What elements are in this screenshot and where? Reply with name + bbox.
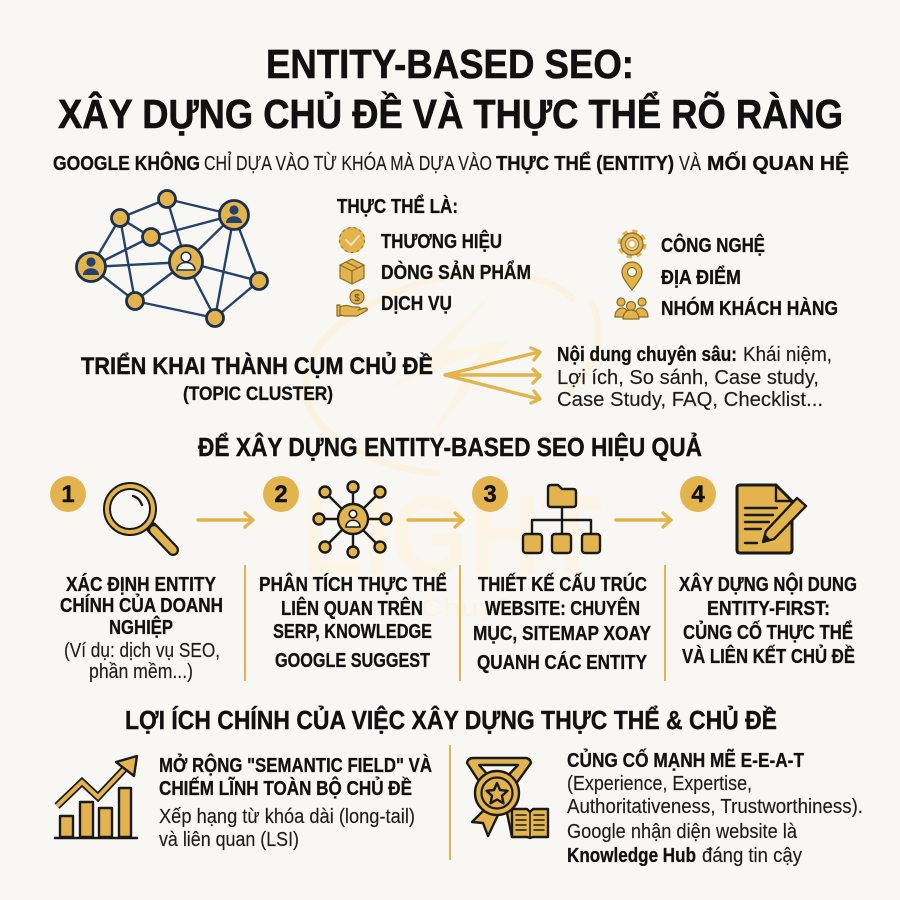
- step 1: [50, 476, 223, 683]
- subtitle: THỰC THỂ (ENTITY): [496, 152, 674, 175]
- watermark logo: Chuyên: [420, 595, 530, 622]
- benefit 1 text: CHIẾM LĨNH TOÀN BỘ CHỦ ĐỀ: [159, 776, 412, 800]
- section heading: benefits: LỢI ÍCH CHÍNH CỦA VIỆC XÂY DỰNG THỰC THỂ & CHỦ ĐỀ: [125, 704, 777, 735]
- step 1 text: phần mềm...): [89, 661, 193, 683]
- topic cluster heading: (TOPIC CLUSTER): [183, 384, 333, 405]
- step 1 text: [60, 573, 223, 683]
- icon: hand with coin: $: [354, 293, 360, 304]
- step 3 number: 3: [483, 481, 497, 508]
- icon: people: [615, 298, 648, 319]
- step 4 number: 4: [691, 481, 705, 508]
- step 4 text: VÀ LIÊN KẾT CHỦ ĐỀ: [682, 644, 855, 668]
- step 1 text: XÁC ĐỊNH ENTITY: [66, 573, 217, 596]
- icon: entity hub: [314, 482, 392, 558]
- step 4: [679, 476, 857, 668]
- step 3: [472, 476, 652, 674]
- benefit 1 text: Xếp hạng từ khóa dài (long-tail): [159, 806, 415, 828]
- icon: map pin: [622, 262, 642, 290]
- watermark logo: LIGHT: [302, 473, 602, 598]
- step 4 text: ENTITY-FIRST:: [707, 598, 830, 620]
- label: thuong hieu: THƯƠNG HIỆU: [381, 229, 502, 253]
- icon: badge check: [340, 228, 364, 252]
- watermark logo: [302, 272, 602, 622]
- section heading: steps: ĐỂ XÂY DỰNG ENTITY-BASED SEO HIỆU QUẢ: [198, 432, 702, 462]
- network diagram: [76, 190, 268, 326]
- title: ENTITY-BASED SEO:: [266, 41, 634, 87]
- step 2 number: [263, 476, 299, 512]
- subtitle: MỐI QUAN HỆ: [707, 151, 849, 175]
- cluster content text: Lợi ích, So sánh, Case study,: [557, 367, 819, 389]
- cluster content text: [557, 344, 832, 411]
- step 1 text: NGHIỆP: [109, 615, 173, 639]
- cluster content text: Khái niệm,: [743, 344, 832, 366]
- cluster content text: Nội dung chuyên sâu:: [557, 344, 737, 366]
- subtitle: [53, 151, 849, 175]
- entity heading: THỰC THỂ LÀ:: [337, 195, 458, 218]
- topic cluster heading: TRIỂN KHAI THÀNH CỤM CHỦ ĐỀ: [81, 351, 433, 380]
- step 2 text: PHÂN TÍCH THỰC THỂ: [259, 572, 447, 596]
- benefit 1 text: MỞ RỘNG "SEMANTIC FIELD" VÀ: [159, 753, 432, 777]
- entity list: [337, 195, 838, 320]
- benefit 2 text: Authoritativeness, Trustworthiness).: [567, 796, 863, 818]
- benefit 2 text: CỦNG CỐ MẠNH MẼ E-E-A-T: [567, 748, 804, 772]
- benefit 2 text: [567, 748, 863, 867]
- benefit 2 text: Knowledge Hub: [567, 845, 696, 867]
- benefit 2 text: đáng tin cậy: [702, 845, 802, 867]
- arrow 2 to 3: [408, 513, 463, 527]
- subtitle: CHỈ DỰA VÀO TỪ KHÓA MÀ DỰA VÀO: [204, 152, 492, 175]
- icon: growth chart: [55, 756, 137, 838]
- step 4 number: [680, 476, 716, 512]
- arrow 1 to 2: [198, 513, 253, 527]
- step 3 text: QUANH CÁC ENTITY: [477, 651, 648, 674]
- title: [58, 41, 843, 137]
- benefit 2: [467, 748, 863, 867]
- step 3 text: [473, 572, 652, 674]
- subtitle: VÀ: [679, 152, 702, 175]
- icon: document and pencil: [737, 485, 806, 553]
- icon: medal and book: [467, 758, 548, 838]
- step 3 text: WEBSITE: CHUYÊN: [485, 596, 640, 620]
- topic cluster heading: [81, 351, 433, 405]
- step 4 text: CỦNG CỐ THỰC THỂ: [683, 620, 853, 644]
- label: cong nghe: CÔNG NGHỆ: [661, 233, 765, 257]
- step 2 number: 2: [274, 481, 288, 508]
- label: dia diem: ĐỊA ĐIỂM: [661, 266, 741, 289]
- icon: magnifier: [107, 486, 173, 550]
- arrow 3 to 4: [616, 513, 671, 527]
- benefit 2 text: (Experience, Expertise,: [567, 773, 752, 795]
- cluster content text: Case Study, FAQ, Checklist...: [557, 389, 823, 411]
- step 2 text: [259, 572, 447, 672]
- label: dich vu: DỊCH VỤ: [381, 293, 452, 315]
- benefit 1 text: [159, 753, 432, 851]
- step 2 text: SERP, KNOWLEDGE: [273, 621, 432, 643]
- step 1 text: CHÍNH CỦA DOANH: [60, 593, 223, 617]
- step 4 text: XÂY DỰNG NỘI DUNG: [679, 572, 857, 596]
- subtitle: GOOGLE KHÔNG: [53, 151, 200, 175]
- benefit 1: [55, 753, 432, 851]
- step 2: [259, 476, 447, 672]
- step 1 number: 1: [61, 481, 75, 508]
- label: nhom khach hang: NHÓM KHÁCH HÀNG: [661, 296, 838, 320]
- benefit 2 text: Google nhận diện website là: [567, 821, 798, 843]
- label: dong san pham: DÒNG SẢN PHẨM: [381, 260, 531, 284]
- step 3 number: [472, 476, 508, 512]
- step 2 text: GOOGLE SUGGEST: [275, 650, 430, 672]
- icon: gear: [620, 232, 644, 256]
- icon: site structure: [523, 485, 600, 553]
- step 2 text: LIÊN QUAN TRÊN: [281, 596, 423, 620]
- arrows: topic cluster fan: [445, 348, 540, 403]
- icon: hand with coin: [337, 290, 367, 316]
- benefit 1 text: và liên quan (LSI): [159, 829, 299, 851]
- step 1 number: [50, 476, 86, 512]
- step 3 text: THIẾT KẾ CẤU TRÚC: [478, 572, 647, 596]
- step 4 text: [679, 572, 857, 668]
- step 3 text: MỤC, SITEMAP XOAY: [473, 623, 652, 645]
- icon: box: [340, 259, 364, 284]
- step 1 text: (Ví dụ: dịch vụ SEO,: [64, 640, 220, 662]
